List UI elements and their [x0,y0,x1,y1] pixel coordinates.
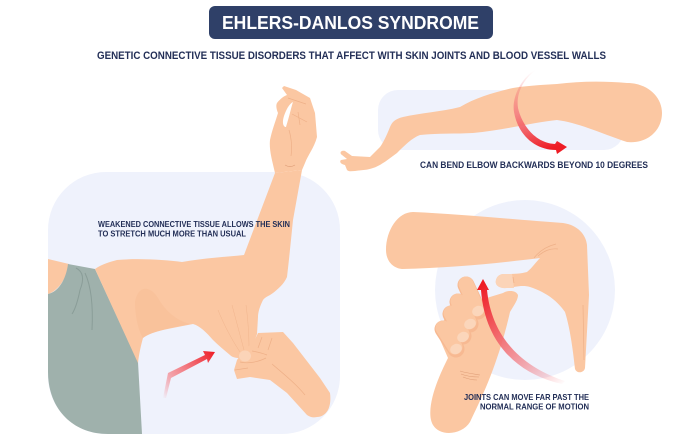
underarm shading [135,289,190,338]
panel background [48,172,340,434]
shoulder skin [48,259,69,294]
title [209,6,493,39]
caption: joints: NORMAL RANGE OF MOTION [480,402,589,412]
fingernails [448,304,486,356]
panel background [378,90,624,150]
fingers [443,284,478,349]
caption: elbow: CAN BEND ELBOW BACKWARDS BEYOND 10 DEGREES [420,160,648,170]
title: EHLERS-DANLOS SYNDROME [222,12,479,33]
raised arm with hanging skin [95,170,302,363]
caption: joints [464,393,589,412]
bent hand [386,212,589,372]
raised hand [270,86,317,173]
red curved arrow [477,279,565,384]
caption: joints: JOINTS CAN MOVE FAR PAST THE [464,393,589,402]
grey shirt [48,264,142,434]
extended arm [340,82,662,171]
caption: stretch: WEAKENED CONNECTIVE TISSUE ALLOWS THE SKIN [98,220,290,229]
red arrow [163,351,215,398]
panel: joints [386,200,615,433]
panel: elbow [340,70,662,171]
pinching hand [234,332,330,417]
caption: stretch: TO STRETCH MUCH MORE THAN USUAL [98,230,246,238]
thumbnail [239,350,251,362]
panel: stretched skin [48,86,340,434]
subtitle: GENETIC CONNECTIVE TISSUE DISORDERS THAT AFFECT WITH SKIN JOINTS AND BLOOD VESSEL WALLS [97,50,606,62]
caption: stretch [98,220,290,238]
panel background [435,200,615,380]
red curved arrow [514,70,567,154]
lower hand [430,284,518,433]
